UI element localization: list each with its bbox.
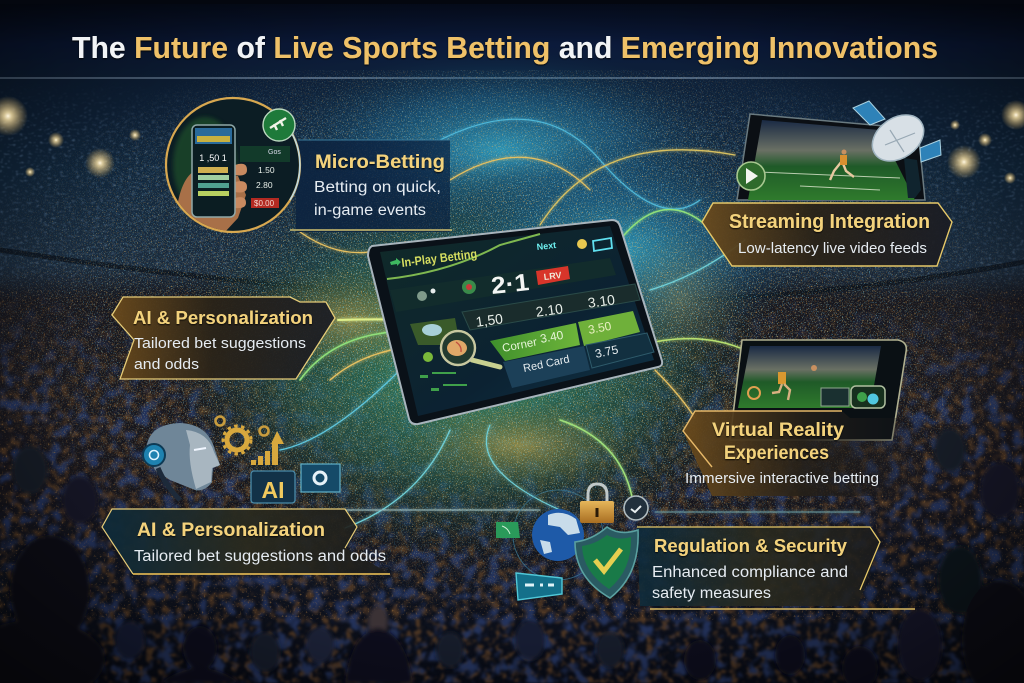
icon: phone in hand circle: 1 ,50 1: [199, 153, 227, 163]
red card row: Red Card: [522, 353, 571, 375]
green odds row: [490, 311, 640, 361]
score row: 2·1: [490, 269, 530, 300]
icon: AI box: AI: [262, 477, 284, 503]
label plate: Streaming Integration: [729, 211, 930, 233]
icon: green tag: [496, 522, 520, 538]
icon: phone in hand circle: $0.00: [254, 199, 275, 208]
header: [387, 234, 612, 279]
label plate: Enhanced compliance and: [652, 564, 848, 581]
label plate: Experiences: [724, 442, 829, 464]
icon: green badge: [263, 109, 295, 141]
header: Next: [536, 240, 557, 252]
odds row: 2.10: [535, 300, 564, 320]
icon: gears and chart: [216, 416, 284, 465]
label plate: Virtual Reality: [712, 419, 844, 441]
icon: shield: [575, 527, 638, 598]
panel: AI & Personalization (upper): [112, 297, 335, 379]
panel: AI & Personalization (lower): AI & Personalization: [137, 520, 325, 541]
icon: satellite dish: [853, 101, 941, 198]
label plate: Immersive interactive betting: [685, 470, 879, 487]
icon: padlock: [580, 484, 614, 523]
icon: streaming tablet: [737, 114, 925, 200]
label plate: Betting on quick,: [314, 179, 441, 196]
panel: Streaming Integration: [702, 101, 952, 266]
green odds row: 3.40: [539, 328, 565, 346]
panel: central tablet In-Play Betting: [368, 220, 662, 424]
panel: AI & Personalization (upper): AI & Personalization: [133, 307, 313, 328]
label plate: Regulation & Security: [654, 535, 848, 556]
red card row: 3.75: [594, 342, 620, 361]
panel: Virtual Reality Experiences: [683, 340, 925, 496]
icon: phone in hand circle: Gos: [268, 149, 281, 156]
panel: AI & Personalization (lower): Tailored bet suggestions and odds: [134, 548, 386, 565]
odds row: 3.10: [587, 291, 616, 311]
label plate: in-game events: [314, 202, 426, 219]
odds row: [462, 284, 640, 330]
panel: Micro-Betting: [166, 98, 452, 232]
label plate: safety measures: [652, 585, 771, 602]
red card row: [503, 333, 654, 388]
icon: phone in hand circle: 1.50: [258, 165, 275, 175]
label plate: Micro-Betting: [315, 151, 445, 173]
panel: AI & Personalization (lower): [102, 509, 390, 574]
icon: phone in hand circle: [166, 98, 300, 232]
header: In-Play Betting: [401, 247, 478, 270]
title band: [0, 0, 1024, 65]
icon: AI box: [251, 471, 295, 503]
label plate: Low-latency live video feeds: [738, 241, 927, 257]
label plate: [683, 411, 925, 496]
green odds row: Corner: [501, 336, 538, 355]
icon: magnifier: [441, 331, 500, 367]
panel: Regulation & Security: [496, 484, 915, 609]
crowd silhouettes: [0, 428, 1024, 683]
icon: check badge: [624, 496, 648, 520]
odds row: 1,50: [475, 310, 504, 330]
tablet body: [368, 220, 662, 424]
label plate: [290, 140, 452, 232]
panel: AI & Personalization (upper): Tailored bet suggestions: [134, 335, 306, 352]
label plate: [702, 203, 952, 266]
title: The Future of Live Sports Betting and Emerging Innovations: [72, 30, 938, 65]
icon: AI robot head: [143, 423, 220, 500]
icon: phone in hand circle: 2.80: [256, 180, 273, 190]
icon: globe: [513, 490, 603, 580]
icon: play button: [737, 162, 765, 190]
score row: LRV: [543, 270, 562, 282]
stadium lights: [0, 96, 1024, 184]
label plate: [637, 527, 915, 609]
panel: AI & Personalization (upper): and odds: [134, 356, 199, 373]
score row: [390, 258, 616, 312]
icon: teal data box: [516, 573, 562, 600]
icon: settings screen: [301, 464, 340, 492]
green odds row: 3.50: [587, 319, 613, 337]
icon: VR tablet: [730, 340, 906, 440]
energy lines: [280, 119, 910, 528]
